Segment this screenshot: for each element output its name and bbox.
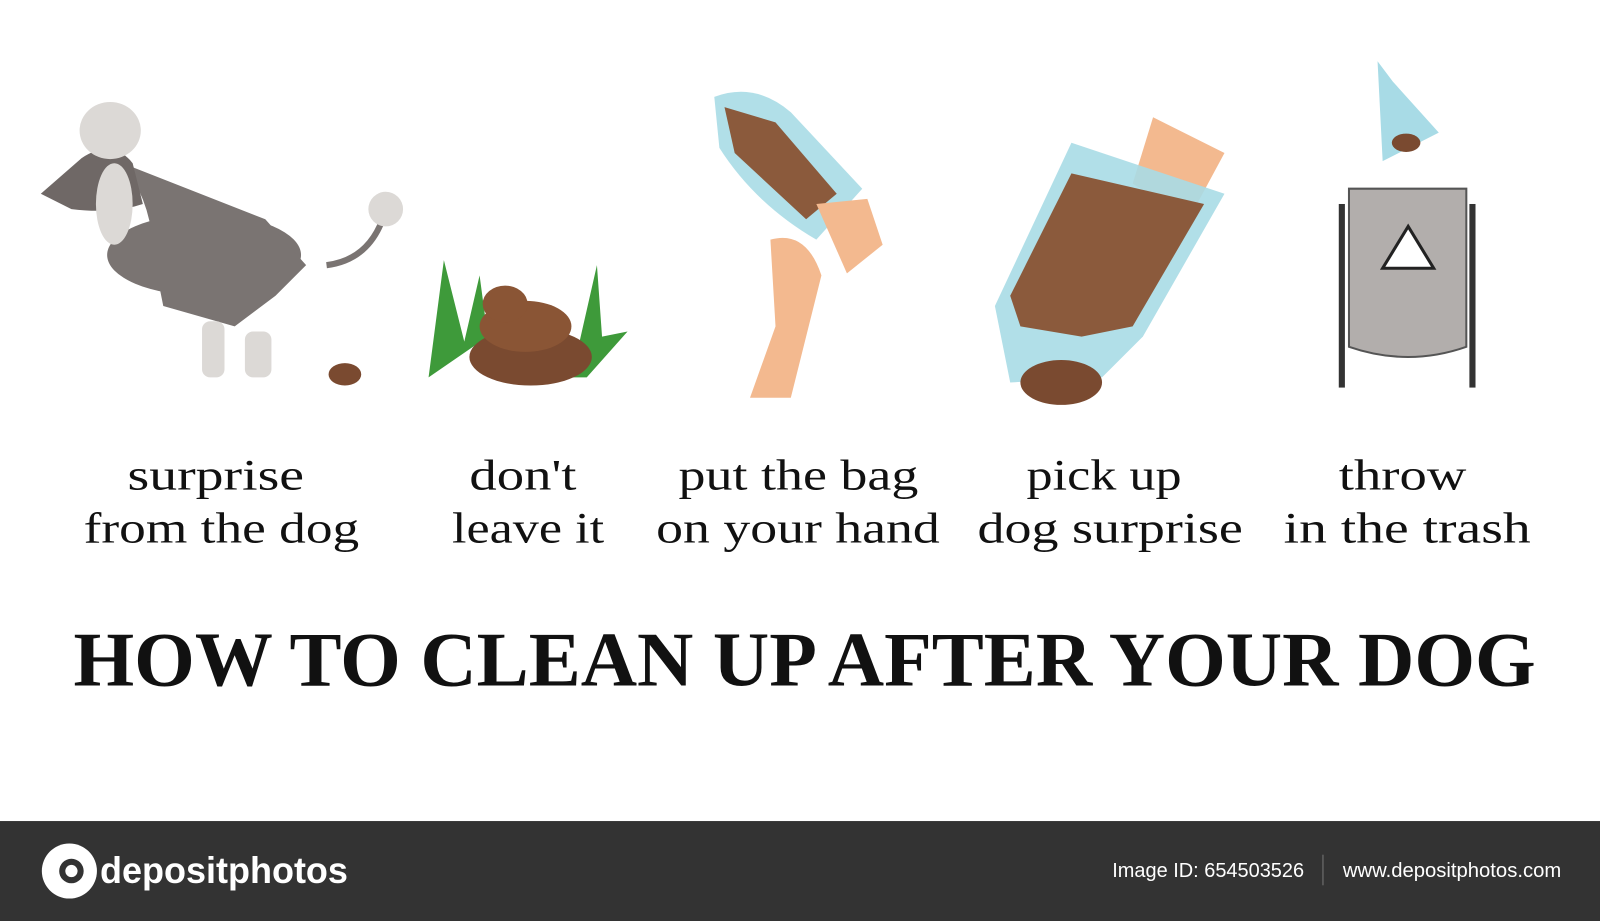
step labels: on your hand xyxy=(656,505,940,553)
footer url: www.depositphotos.com xyxy=(1342,860,1561,882)
step labels: leave it xyxy=(452,505,604,553)
step labels: put the bag xyxy=(679,452,918,500)
icon: picking up xyxy=(995,117,1224,405)
footer bar xyxy=(0,821,1600,921)
step labels: don't xyxy=(469,452,577,500)
icon: trash can xyxy=(1339,61,1476,388)
footer logo xyxy=(42,843,348,899)
step labels: pick up xyxy=(1027,452,1182,500)
icon: bag on hand xyxy=(714,92,883,398)
step labels: in the trash xyxy=(1284,505,1531,553)
step labels: throw xyxy=(1339,452,1467,500)
step labels: from the dog xyxy=(84,505,359,553)
footer logo: depositphotos xyxy=(100,850,348,891)
step labels: surprise xyxy=(128,452,304,500)
step labels xyxy=(84,452,1531,553)
footer image id: Image ID: 654503526 xyxy=(1112,860,1304,882)
icon: poop in grass xyxy=(429,260,628,386)
icon: dog squatting xyxy=(41,102,403,386)
step labels: dog surprise xyxy=(978,505,1243,553)
title: HOW TO CLEAN UP AFTER YOUR DOG xyxy=(73,616,1536,702)
